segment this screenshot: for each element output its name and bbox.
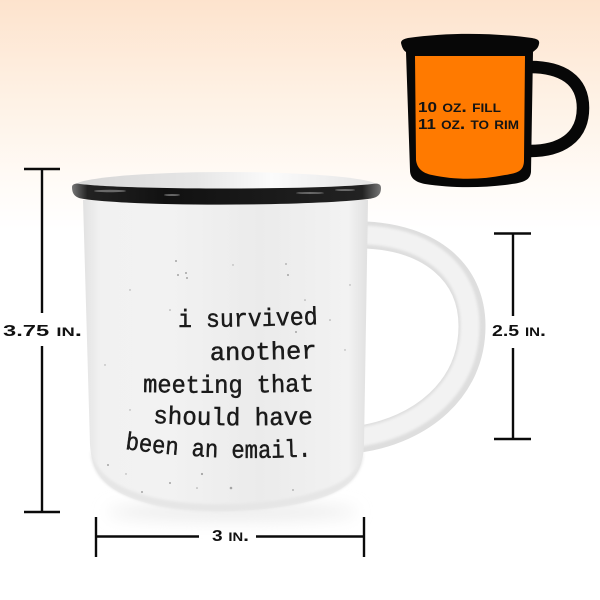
dimension: width 3 in [96, 517, 364, 557]
mug black rim [72, 184, 381, 205]
mug quote: another [211, 341, 314, 360]
mug handle [360, 235, 472, 439]
mug quote: should have [154, 405, 312, 426]
mug quote: i survived [179, 306, 316, 328]
speckles [104, 260, 351, 493]
photo: white enamel mug [72, 172, 512, 522]
dimension: height 3.75 in: 3.75 in. [3, 321, 82, 340]
icon mug silhouette [401, 34, 539, 187]
mug quote [126, 306, 316, 458]
mug quote: been an email. [126, 431, 306, 458]
mug bottom edge shade [90, 450, 364, 511]
dimension: handle height 2.5 in [492, 234, 546, 439]
mug body [83, 200, 368, 511]
dimension: handle height 2.5 in: 2.5 in. [492, 321, 546, 340]
rim highlights [94, 189, 355, 196]
mug ground shadow [107, 503, 357, 521]
icon: capacity mug [401, 34, 583, 187]
dimension: width 3 in: 3 in. [212, 526, 249, 545]
icon orange fill [415, 56, 525, 179]
mug quote: meeting that [144, 374, 312, 398]
capacity text: 10 oz. fill [418, 97, 501, 116]
capacity text: 11 oz. to rim [418, 114, 519, 133]
background gradient [0, 0, 600, 230]
mug inner rim [74, 172, 378, 200]
dimension: height 3.75 in [3, 169, 82, 512]
icon handle [530, 67, 583, 151]
capacity text [418, 97, 519, 133]
